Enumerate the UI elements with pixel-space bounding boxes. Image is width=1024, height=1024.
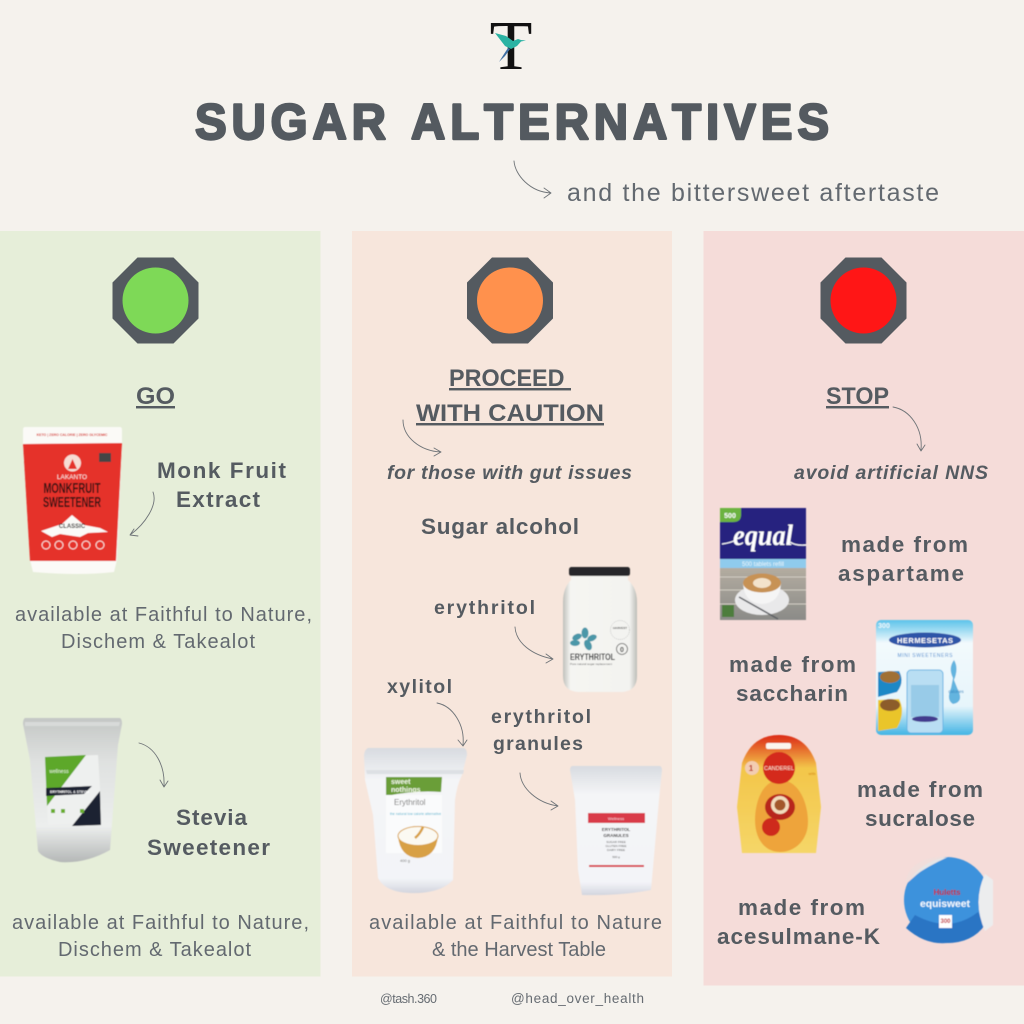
product: Lakanto monk fruit bag: SWEETENER — [43, 494, 101, 511]
product: erythritol jar — [563, 567, 637, 692]
icon: hummingbird — [495, 33, 526, 62]
product: erythritol jar: Pure natural sugar replacement — [570, 662, 612, 666]
title — [195, 95, 829, 150]
panel background: caution — [352, 231, 672, 976]
product: Lakanto monk fruit bag: CLASSIC — [59, 524, 86, 530]
product: erythritol granules bag: GRANULES — [603, 833, 629, 838]
product: equal box — [720, 508, 806, 620]
product: sweet nothings xylitol bag: nothings — [391, 787, 421, 794]
product: sweet nothings xylitol bag: Erythritol — [394, 798, 426, 807]
product: hermesetas pack — [876, 620, 973, 735]
arrow: stop — [893, 407, 925, 451]
label: made from sucralose — [857, 777, 983, 831]
panel: proceed with caution — [352, 231, 672, 976]
product: erythritol granules bag: SUGAR FREE — [606, 840, 626, 844]
product: equal box: equal — [733, 519, 794, 552]
product: erythritol jar: HARVEST — [613, 626, 627, 630]
label: made from saccharin: saccharin — [736, 681, 848, 706]
arrow: gut issues — [403, 420, 441, 456]
text: monk fruit availability — [15, 604, 312, 653]
product: huletts equisweet dispenser: Huletts — [933, 888, 961, 897]
icon: red traffic light — [820, 258, 906, 344]
credit: tash.360: @tash.360 — [380, 992, 437, 1006]
text: stevia availability: available at Faithful to Nature, — [12, 912, 309, 934]
text: stevia availability: Dischem & Takealot — [58, 939, 251, 961]
product: canderel dispenser: 1 — [749, 764, 754, 773]
label: made from acesulmane-K: acesulmane-K — [717, 924, 881, 949]
product: sweet nothings xylitol bag — [364, 748, 467, 893]
product: huletts equisweet dispenser: equisweet — [920, 899, 971, 910]
product: stevia sweetener bag — [23, 718, 122, 862]
arrow: xylitol — [437, 703, 467, 746]
panel background: stop — [704, 231, 1024, 986]
product: erythritol jar: ERYTHRITOL — [570, 652, 615, 663]
text: caution availability: available at Faithful to Nature — [369, 912, 662, 934]
label: erythritol granules — [491, 706, 591, 755]
product: huletts equisweet dispenser — [904, 856, 993, 943]
product: hermesetas pack: calories — [948, 689, 964, 694]
product: sweet nothings xylitol bag: 400 g — [400, 858, 410, 863]
label: stevia sweetener: Stevia — [176, 805, 247, 830]
heading: go: GO — [136, 383, 175, 410]
heading: stop: STOP — [826, 383, 889, 410]
label: stevia sweetener: Sweetener — [147, 835, 270, 860]
panel background: go — [0, 231, 320, 976]
product: canderel dispenser — [737, 735, 821, 853]
panel: go — [0, 231, 320, 976]
arrow: monk fruit — [130, 492, 154, 536]
panel: stop — [704, 231, 1024, 986]
product: hermesetas pack: MINI SWEETENERS — [898, 653, 953, 659]
arrow: erythritol — [515, 627, 553, 663]
product: Lakanto monk fruit bag: MONKFRUIT — [44, 480, 100, 497]
label: made from aspartame — [838, 532, 968, 586]
product: erythritol granules bag: Wellness — [608, 816, 624, 821]
label: made from saccharin — [729, 652, 856, 706]
icon: green traffic light — [112, 258, 198, 344]
subheading: sugar alcohol: Sugar alcohol — [421, 514, 579, 539]
note: avoid artificial NNS: avoid artificial NNS — [794, 462, 988, 484]
product: hermesetas pack: 300 — [878, 623, 890, 630]
text: monk fruit availability: Dischem & Takealot — [61, 631, 255, 653]
label: made from aspartame: aspartame — [838, 561, 964, 586]
product: stevia sweetener bag: wellness — [49, 769, 69, 775]
product: Lakanto monk fruit bag: LAKANTO — [57, 474, 87, 481]
label: made from aspartame: made from — [841, 532, 968, 557]
arrow: stevia — [139, 743, 168, 787]
label: made from saccharin: made from — [729, 652, 856, 677]
title: SUGAR — [195, 95, 386, 150]
product: canderel dispenser: CANDEREL — [764, 766, 794, 772]
heading: proceed with caution: WITH CAUTION — [416, 400, 604, 427]
heading: proceed with caution — [416, 365, 604, 427]
label: monk fruit extract: Extract — [176, 487, 260, 512]
text: caution availability — [369, 912, 662, 961]
label: erythritol: erythritol — [434, 597, 535, 619]
note: for those with gut issues: for those with gut issues — [387, 462, 632, 484]
product: hermesetas pack: HERMESETAS — [897, 636, 953, 645]
product: equal box: 500 — [724, 513, 736, 520]
icon: orange traffic light — [467, 258, 553, 344]
product: canderel dispenser: with — [808, 772, 816, 776]
product: stevia sweetener bag: ERYTHRITOL & STEVIA — [50, 790, 90, 794]
text: stevia availability — [12, 912, 309, 961]
label: made from acesulmane-K — [717, 895, 881, 949]
label: xylitol: xylitol — [387, 676, 452, 698]
label: erythritol granules: erythritol — [491, 706, 591, 728]
text: caution availability: & the Harvest Table — [432, 939, 606, 961]
title: ALTERNATIVES — [411, 95, 829, 150]
product: huletts equisweet dispenser: 300 — [940, 919, 951, 925]
product: Lakanto monk fruit bag: KETO | ZERO CALORIE | ZERO GLYCEMIC — [37, 433, 108, 437]
logo: T with hummingbird: T — [490, 8, 532, 85]
text: monk fruit availability: available at Faithful to Nature, — [15, 604, 312, 626]
label: made from acesulmane-K: made from — [738, 895, 865, 920]
product: erythritol granules bag: ERYTHRITOL — [602, 827, 630, 832]
credit: head_over_health: @head_over_health — [511, 991, 644, 1006]
product: erythritol granules bag: GLUTEN FREE — [605, 844, 627, 848]
label: made from sucralose: sucralose — [865, 806, 975, 831]
product: sweet nothings xylitol bag: sweet — [391, 779, 411, 786]
label: monk fruit extract: Monk Fruit — [157, 458, 286, 483]
product: erythritol granules bag: 500 g — [612, 855, 620, 859]
arrow: erythritol granules — [520, 773, 558, 810]
label: made from sucralose: made from — [857, 777, 983, 802]
product: erythritol jar: 0 — [620, 647, 624, 654]
product: equal box: 500 tablets refill — [742, 562, 784, 568]
heading: proceed with caution: PROCEED — [449, 365, 571, 392]
label: stevia sweetener — [147, 805, 270, 860]
product: sweet nothings xylitol bag: the natural low calorie alternative — [390, 812, 441, 816]
product: erythritol granules bag: DAIRY FREE — [607, 848, 625, 852]
label: erythritol granules: granules — [493, 733, 583, 755]
label: monk fruit extract — [157, 458, 286, 512]
product: Lakanto monk fruit bag — [23, 427, 122, 574]
subtitle: and the bittersweet aftertaste — [567, 179, 939, 207]
arrow: title to subtitle — [514, 161, 551, 198]
product: erythritol granules bag — [570, 766, 662, 895]
